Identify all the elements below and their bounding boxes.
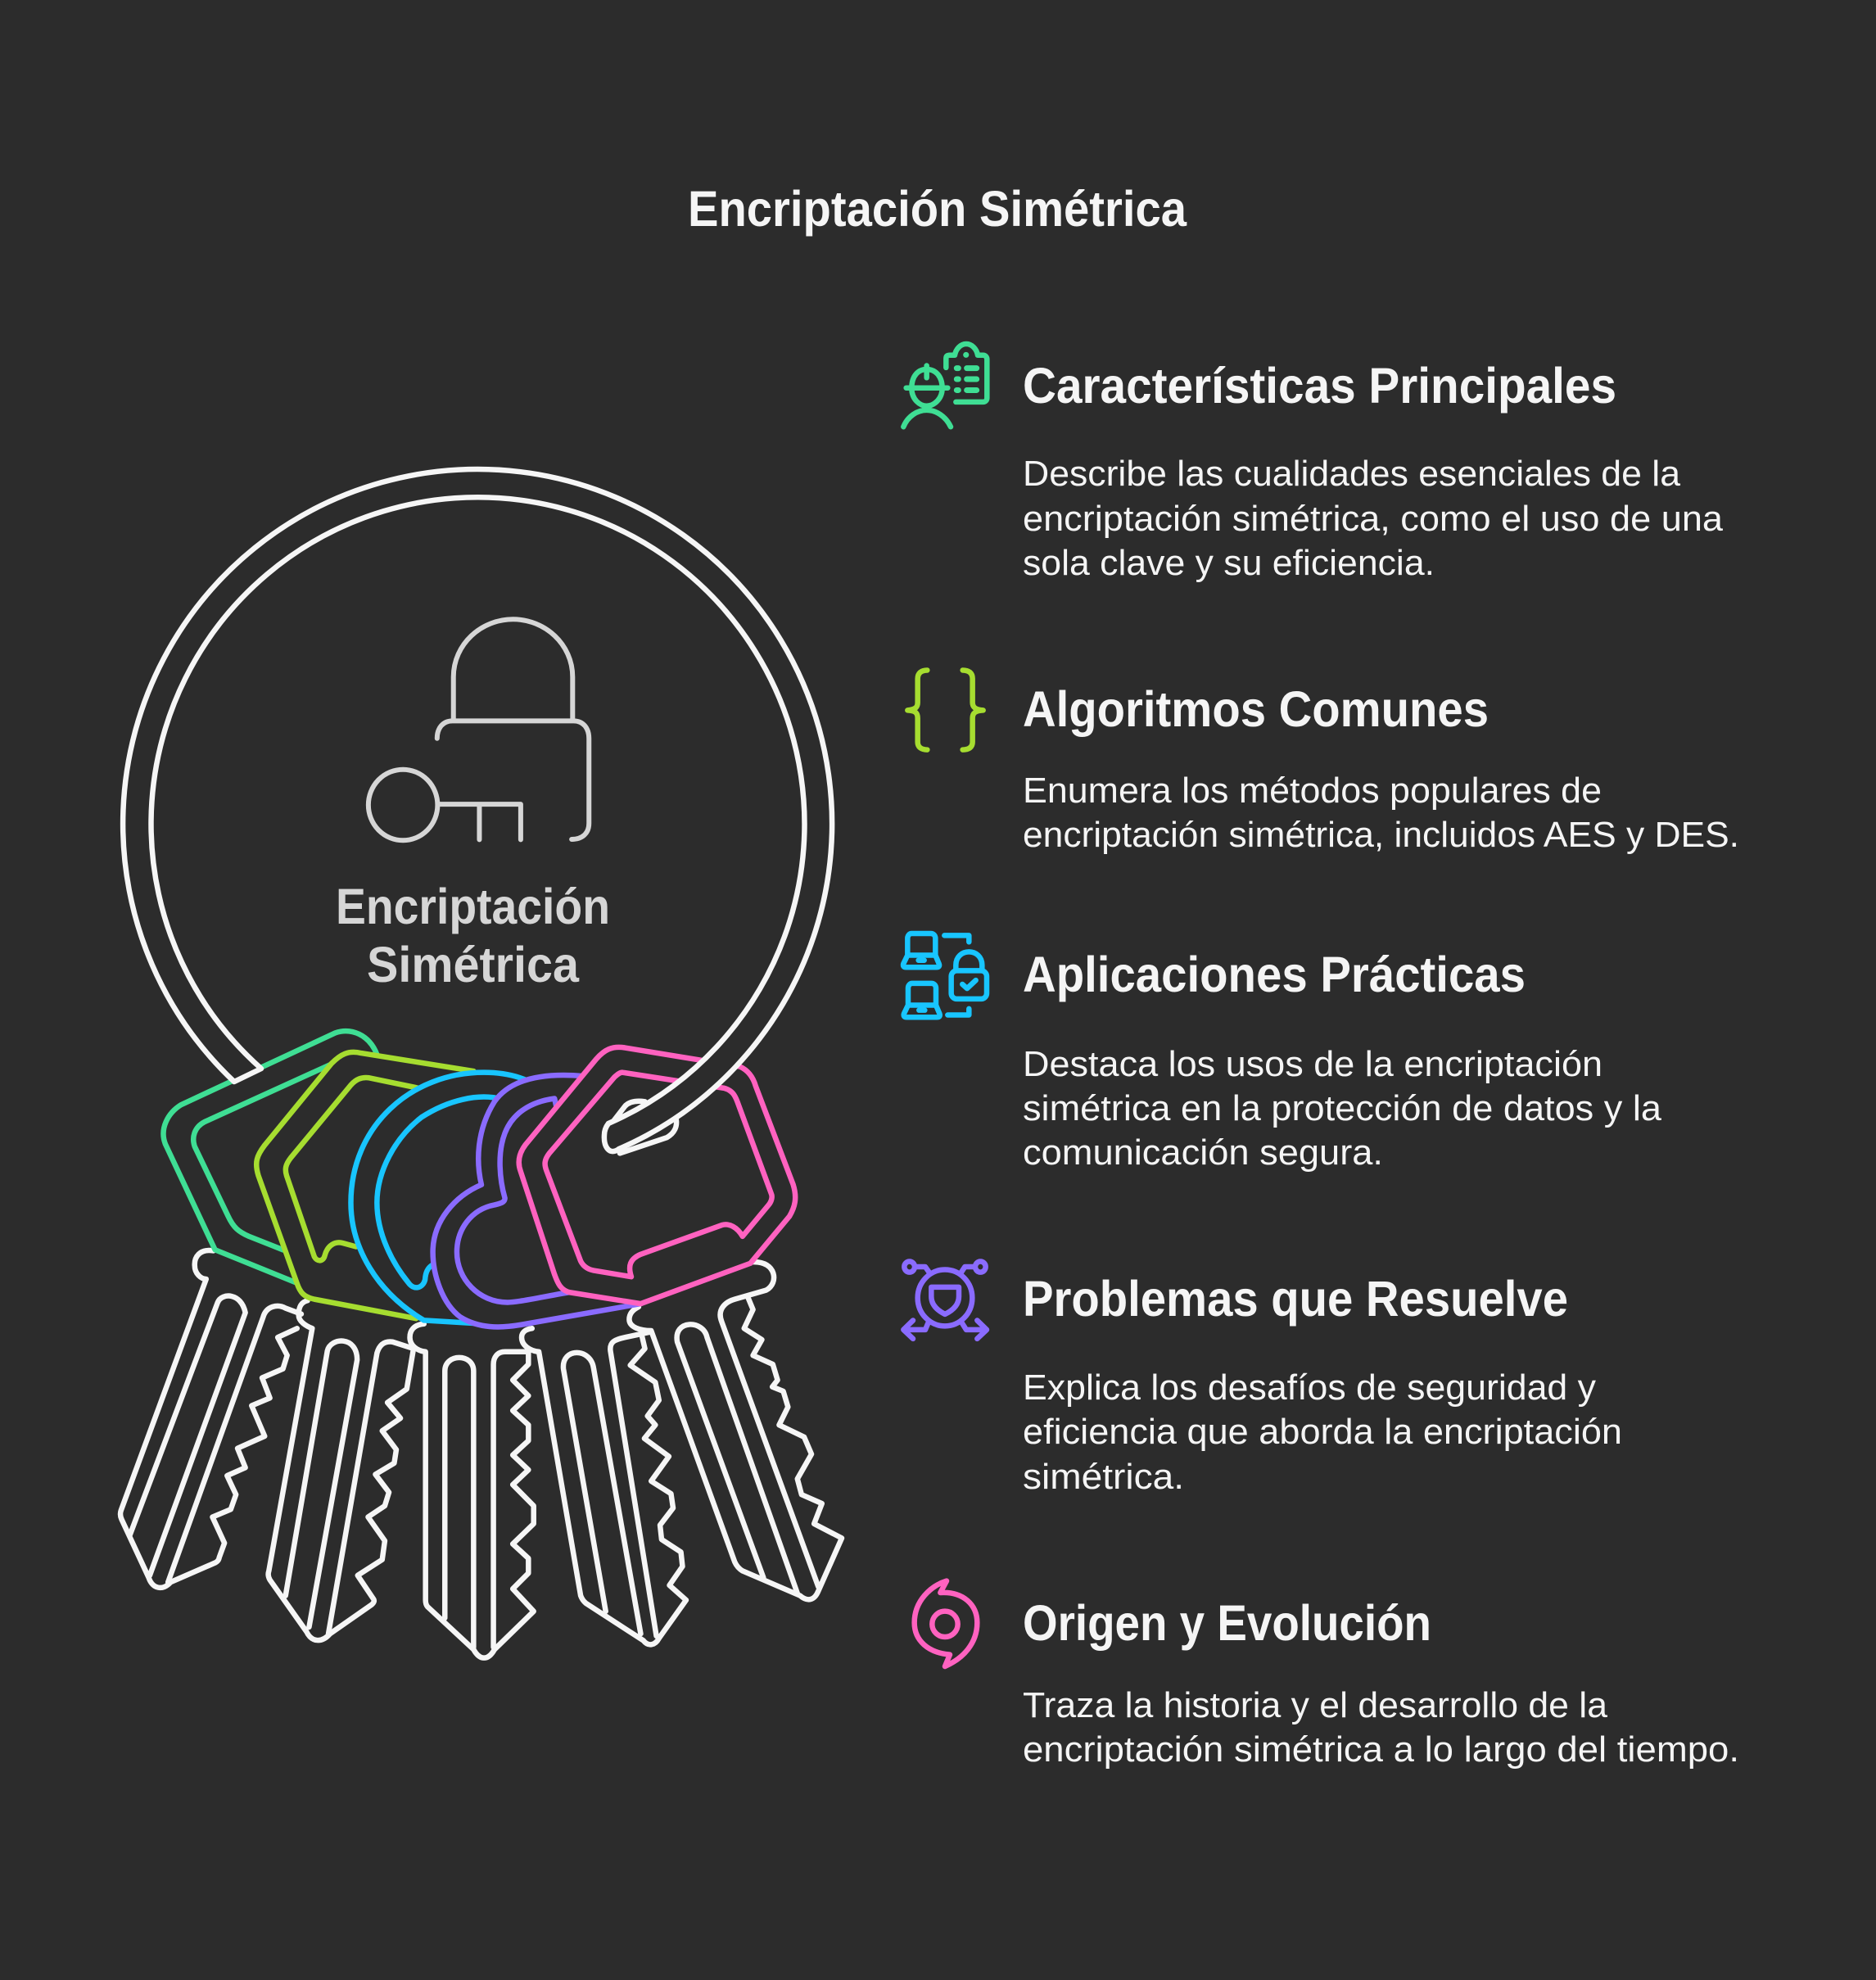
key blade 2 xyxy=(269,1300,414,1640)
text: algoritmos xyxy=(1023,771,1739,855)
key blade 4 xyxy=(522,1328,686,1644)
text: características xyxy=(1023,454,1724,583)
text: problemas: Explica los desafíos de seguridad y xyxy=(1023,1368,1596,1408)
text: características: Describe las cualidades esenciales de la xyxy=(1023,454,1681,494)
key blade 3 xyxy=(410,1324,534,1658)
text: origen: Traza la historia y el desarrollo de la xyxy=(1023,1686,1608,1725)
icon: curly braces xyxy=(907,670,983,750)
text: aplicaciones: Destaca los usos de la encriptación xyxy=(1023,1045,1603,1084)
text: problemas: simétrica. xyxy=(1023,1458,1184,1497)
icon: shield network xyxy=(903,1262,987,1339)
green key bow xyxy=(164,1031,422,1282)
text: aplicaciones: comunicación segura. xyxy=(1023,1133,1383,1173)
key shaft xyxy=(438,804,521,839)
colored key bows xyxy=(164,1031,795,1327)
text: origen xyxy=(1023,1686,1739,1770)
central label xyxy=(336,879,610,992)
padlock shackle xyxy=(454,619,572,719)
key blade 1 xyxy=(120,1250,301,1588)
key ring xyxy=(123,469,832,1151)
text: problemas: eficiencia que aborda la encriptación xyxy=(1023,1413,1622,1452)
lime key bow xyxy=(256,1052,500,1318)
central icon: padlock and key xyxy=(368,619,589,840)
heading: problemas: Problemas que Resuelve xyxy=(1023,1271,1568,1327)
blue key bow xyxy=(350,1073,552,1324)
icon: laptops and lock xyxy=(903,933,987,1017)
central label: Encriptación xyxy=(336,879,610,934)
white key blades xyxy=(120,1250,842,1658)
key blade 5 xyxy=(629,1262,842,1599)
text: características: sola clave y su eficiencia. xyxy=(1023,544,1435,583)
icon: worker with clipboard xyxy=(903,344,987,427)
padlock body xyxy=(437,721,589,839)
heading: aplicaciones: Aplicaciones Prácticas xyxy=(1023,947,1526,1002)
pink key bow xyxy=(519,1047,795,1304)
icon: origin swirl xyxy=(915,1581,977,1666)
text: algoritmos: encriptación simétrica, incluidos AES y DES. xyxy=(1023,816,1739,855)
heading: algoritmos: Algoritmos Comunes xyxy=(1023,681,1489,737)
key head xyxy=(368,770,437,840)
text: características: encriptación simétrica, como el uso de una xyxy=(1023,500,1724,539)
heading: características: Características Principales xyxy=(1023,358,1616,414)
text: algoritmos: Enumera los métodos populares de xyxy=(1023,771,1602,811)
title: Encriptación Simétrica xyxy=(688,181,1187,237)
heading: origen: Origen y Evolución xyxy=(1023,1595,1431,1651)
text: problemas xyxy=(1023,1368,1622,1497)
text: aplicaciones: simétrica en la protección de datos y la xyxy=(1023,1089,1662,1128)
text: origen: encriptación simétrica a lo largo del tiempo. xyxy=(1023,1730,1739,1770)
illustration: key ring with five keys xyxy=(120,469,842,1658)
text: aplicaciones xyxy=(1023,1045,1662,1173)
central label: Simétrica xyxy=(367,937,580,992)
purple key bow xyxy=(433,1075,657,1327)
key hole xyxy=(609,1101,676,1153)
